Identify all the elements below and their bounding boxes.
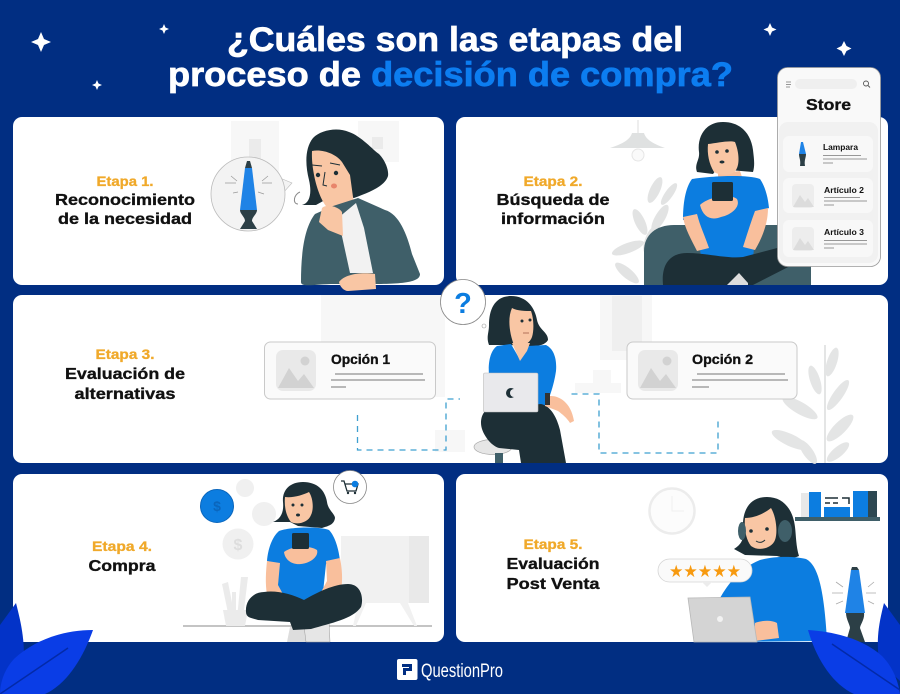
person on sofa with phone bbox=[644, 122, 811, 285]
legs bbox=[481, 404, 566, 463]
title: proceso de decisión de compra? bbox=[168, 56, 733, 94]
title: ¿Cuáles son las etapas del bbox=[227, 21, 683, 59]
store phone mockup bbox=[778, 68, 880, 266]
thought bubble: cart bbox=[334, 470, 366, 504]
dashed connector right bbox=[572, 394, 718, 453]
background window and furniture bbox=[321, 295, 652, 452]
text: etapa 3 bbox=[65, 346, 185, 403]
search icon bbox=[864, 81, 870, 88]
product: artículo 3 bbox=[792, 227, 867, 251]
wall clock bbox=[650, 488, 694, 534]
store heading: Store bbox=[806, 97, 851, 114]
text: etapa 4 bbox=[88, 538, 156, 575]
hair and face bbox=[488, 296, 548, 346]
laptop bbox=[484, 373, 538, 412]
text: etapa 4: Compra bbox=[88, 558, 156, 575]
product: artículo 3: Artículo 3 bbox=[824, 227, 864, 237]
pendant lamp bbox=[610, 120, 665, 161]
white shirt bbox=[338, 203, 373, 273]
text: etapa 3: Evaluación de bbox=[65, 366, 185, 383]
panel: etapa 3 bbox=[13, 295, 888, 466]
text: etapa 3: alternativas bbox=[74, 386, 176, 403]
coins: $ bbox=[234, 537, 243, 554]
text: etapa 5 bbox=[506, 536, 600, 593]
blue shirt bbox=[489, 344, 556, 413]
dashed connector left bbox=[358, 399, 460, 450]
product list bbox=[779, 122, 878, 263]
decorative sparkles bbox=[31, 23, 852, 90]
arm and watch bbox=[545, 393, 574, 423]
product: lámpara bbox=[799, 142, 867, 166]
product: lámpara: Lampara bbox=[823, 142, 858, 152]
potted plant bbox=[222, 577, 248, 626]
text: etapa 2 bbox=[496, 173, 610, 228]
title bbox=[168, 21, 733, 94]
background pictures bbox=[231, 121, 399, 183]
person sitting with phone bbox=[246, 482, 362, 642]
hand on chin bbox=[319, 206, 343, 236]
text: etapa 5: Etapa 5. bbox=[524, 536, 582, 552]
background plant bbox=[769, 345, 857, 466]
panel: etapa 2 bbox=[456, 117, 888, 286]
card: opción 1 bbox=[264, 342, 436, 399]
panel: etapa 1 bbox=[13, 117, 444, 285]
card: opción 2 bbox=[627, 342, 797, 399]
text: etapa 2: información bbox=[501, 211, 605, 228]
jacket bbox=[301, 198, 420, 285]
product: artículo 2: Artículo 2 bbox=[824, 185, 864, 195]
text: etapa 1 bbox=[55, 173, 195, 228]
stool bbox=[474, 440, 512, 463]
text: etapa 2: Búsqueda de bbox=[496, 192, 610, 209]
panel overlap: person thinking with laptop bbox=[440, 280, 574, 463]
panel: etapa 4 bbox=[13, 470, 444, 642]
neck bbox=[512, 343, 530, 361]
background plant bbox=[610, 175, 680, 286]
search bar bbox=[795, 79, 857, 89]
text: etapa 4: Etapa 4. bbox=[92, 538, 152, 554]
leaves: bottom left bbox=[0, 603, 93, 694]
product: artículo 2 bbox=[792, 184, 867, 208]
text: etapa 5: Post Venta bbox=[506, 576, 600, 593]
bookshelf bbox=[795, 491, 880, 521]
cabinet bbox=[341, 536, 429, 626]
logo: QuestionPro: QuestionPro bbox=[421, 661, 503, 682]
text: etapa 1: Reconocimiento bbox=[55, 192, 195, 209]
coins bbox=[200, 479, 276, 560]
thought bubble: question mark bbox=[440, 280, 486, 328]
text: etapa 2: Etapa 2. bbox=[524, 173, 582, 189]
logo: QuestionPro bbox=[397, 659, 503, 682]
resting hand bbox=[339, 273, 376, 291]
thought bubble: question mark: ? bbox=[454, 288, 472, 320]
text: etapa 3: Etapa 3. bbox=[96, 346, 154, 362]
text: etapa 5: Evaluación bbox=[506, 556, 600, 573]
text: etapa 1: de la necesidad bbox=[58, 211, 192, 228]
thought bubble: lava lamp bbox=[211, 157, 292, 231]
card: opción 1: Opción 1 bbox=[331, 352, 390, 367]
floor line bbox=[183, 625, 432, 627]
rating bubble bbox=[658, 559, 752, 587]
card: opción 2: Opción 2 bbox=[692, 352, 753, 367]
person with hand on cheek bbox=[294, 130, 420, 291]
coins: $ bbox=[213, 498, 221, 514]
leaves: bottom right bbox=[808, 603, 900, 694]
text: etapa 1: Etapa 1. bbox=[96, 173, 154, 189]
lava lamp bbox=[832, 567, 876, 642]
menu icon bbox=[786, 82, 791, 87]
person with headset and laptop bbox=[688, 497, 827, 642]
rating bubble: ★★★★★ bbox=[669, 562, 741, 582]
panel: etapa 5 bbox=[456, 474, 888, 642]
